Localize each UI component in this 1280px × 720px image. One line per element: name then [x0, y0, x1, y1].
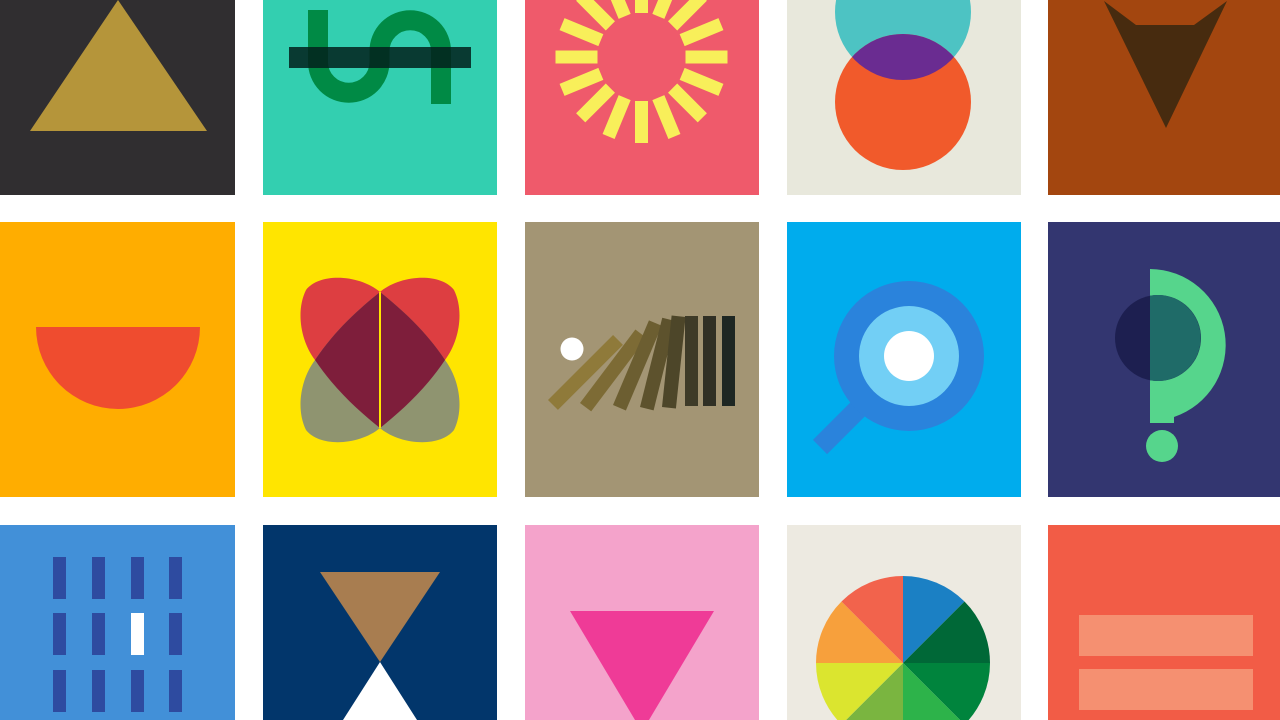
tile: fox	[1048, 0, 1280, 195]
tile: pie	[787, 525, 1021, 720]
tile: equals	[1048, 525, 1280, 720]
tile: circles	[787, 0, 1021, 195]
tile: petals	[263, 222, 497, 497]
tile: sun	[525, 0, 759, 195]
tile: hourglass	[263, 525, 497, 720]
tile: pink triangle	[525, 525, 759, 720]
tile: triangle	[0, 0, 235, 195]
tile: question mark	[1048, 222, 1280, 497]
tile: dollar	[263, 0, 497, 195]
tile: dominoes	[525, 222, 759, 497]
tile: magnifier	[787, 222, 1021, 497]
tile: half circle	[0, 222, 235, 497]
tile: windows	[0, 525, 235, 720]
